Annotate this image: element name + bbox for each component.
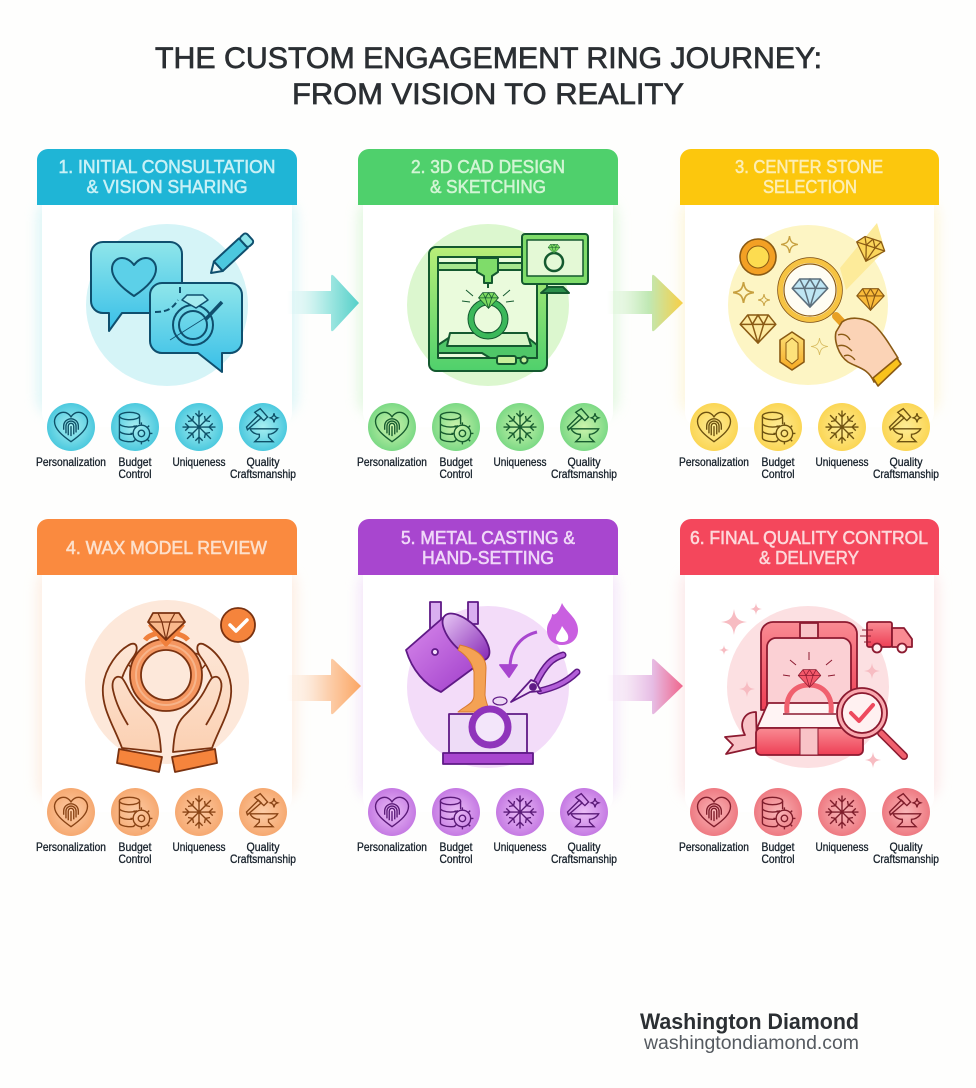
heading: step 2: 2. 3D CAD DESIGN [411, 157, 565, 177]
badge: personalization: Personalization [357, 455, 427, 469]
badge: uniqueness [816, 403, 868, 469]
badge: uniqueness: Uniqueness [172, 840, 226, 854]
heading: step 5: 5. METAL CASTING & [401, 528, 575, 548]
brand footer: Washington Diamond [640, 1009, 859, 1034]
badge: uniqueness: Uniqueness [816, 455, 868, 469]
heading: step 2: & SKETCHING [430, 177, 546, 197]
badge: personalization [679, 403, 749, 469]
heading: step 2 [358, 149, 618, 205]
illustration: 3D printer and monitor with ring [407, 224, 588, 386]
badge: budget control [754, 403, 802, 481]
brand footer: washingtondiamond.com [643, 1033, 859, 1054]
panel: step 6 final quality control [679, 519, 939, 866]
badge: uniqueness [816, 788, 868, 854]
badge: uniqueness [494, 403, 546, 469]
badge: personalization: Personalization [679, 455, 749, 469]
panel: step 2 3D CAD design [357, 149, 618, 481]
heading: step 6: & DELIVERY [759, 548, 859, 568]
badge: uniqueness: Uniqueness [172, 455, 226, 469]
badge: personalization [36, 788, 106, 854]
illustration: magnifier over gemstones held by hand [728, 223, 901, 386]
arrow: step 1 to 2 [287, 275, 359, 331]
title: THE CUSTOM ENGAGEMENT RING JOURNEY: [155, 42, 822, 75]
badge: quality craftsmanship: Craftsmanship [551, 852, 617, 866]
title [155, 42, 822, 111]
badge: quality craftsmanship: Quality [246, 455, 280, 469]
heading: step 1: 1. INITIAL CONSULTATION [58, 157, 276, 177]
badge: personalization: Personalization [679, 840, 749, 854]
badge: uniqueness [172, 403, 226, 469]
badge: personalization: Personalization [36, 840, 106, 854]
badge: quality craftsmanship [230, 788, 296, 866]
badge: uniqueness [494, 788, 546, 854]
badge: budget control: Budget [440, 840, 473, 854]
arrow: step 4 to 5 [287, 659, 361, 714]
badge: personalization [679, 788, 749, 854]
badge: quality craftsmanship: Quality [568, 455, 600, 469]
badge: uniqueness: Uniqueness [494, 455, 546, 469]
badge: budget control: Control [440, 852, 472, 866]
badge: budget control: Budget [762, 455, 795, 469]
badge: quality craftsmanship [551, 788, 617, 866]
badge: budget control: Control [762, 852, 794, 866]
illustration: hands holding wax ring [85, 600, 255, 772]
badge: quality craftsmanship: Craftsmanship [230, 467, 296, 481]
heading: step 6: 6. FINAL QUALITY CONTROL [690, 528, 928, 548]
panel: step 3 center stone selection [679, 149, 939, 481]
badge: personalization: Personalization [36, 455, 106, 469]
heading: step 1: & VISION SHARING [86, 177, 248, 197]
badge: personalization: Personalization [357, 840, 427, 854]
illustration: ring box with magnifier and delivery truck [719, 603, 912, 768]
badge: budget control: Budget [118, 455, 152, 469]
arrow: step 2 to 3 [607, 275, 683, 331]
badge: budget control [432, 788, 480, 866]
badge: personalization [357, 403, 427, 469]
illustration: speech bubbles with heart and ring sketch [86, 224, 254, 386]
badge: quality craftsmanship: Quality [246, 840, 280, 854]
badge: budget control: Control [762, 467, 794, 481]
badge: quality craftsmanship [551, 403, 617, 481]
heading: step 3 [680, 149, 939, 205]
badge: quality craftsmanship: Craftsmanship [873, 467, 939, 481]
badge: quality craftsmanship: Craftsmanship [873, 852, 939, 866]
badge: personalization [357, 788, 427, 854]
badge: budget control [432, 403, 480, 481]
badge: budget control: Budget [762, 840, 795, 854]
badge: budget control: Control [440, 467, 472, 481]
heading: step 5 [358, 519, 618, 575]
title: FROM VISION TO REALITY [292, 78, 684, 111]
badge: uniqueness [172, 788, 226, 854]
heading: step 3: 3. CENTER STONE [735, 157, 883, 177]
heading: step 4: 4. WAX MODEL REVIEW [66, 538, 267, 558]
badge: budget control: Budget [440, 455, 473, 469]
badge: uniqueness: Uniqueness [816, 840, 868, 854]
badge: quality craftsmanship [873, 403, 939, 481]
badge: quality craftsmanship [230, 403, 296, 481]
badge: budget control [111, 788, 159, 866]
heading: step 4 [37, 519, 297, 575]
heading: step 5: HAND-SETTING [422, 548, 554, 568]
panel: step 5 metal casting [357, 519, 618, 866]
heading: step 6 [680, 519, 939, 575]
brand footer [640, 1009, 859, 1054]
badge: personalization [36, 403, 106, 469]
badge: quality craftsmanship: Quality [890, 840, 922, 854]
badge: budget control: Control [118, 852, 152, 866]
panel: step 1 initial consultation [36, 149, 297, 481]
badge: budget control [111, 403, 159, 481]
badge: uniqueness: Uniqueness [494, 840, 546, 854]
badge: quality craftsmanship: Craftsmanship [230, 852, 296, 866]
badge: quality craftsmanship: Quality [568, 840, 600, 854]
heading: step 3: SELECTION [763, 177, 857, 197]
badge: budget control: Budget [118, 840, 152, 854]
arrow: step 5 to 6 [607, 659, 683, 714]
badge: quality craftsmanship: Quality [890, 455, 922, 469]
panel: step 4 wax model review [36, 519, 297, 866]
badge: quality craftsmanship: Craftsmanship [551, 467, 617, 481]
badge: budget control [754, 788, 802, 866]
badge: quality craftsmanship [873, 788, 939, 866]
illustration: crucible pouring metal, pliers and flame [406, 602, 578, 768]
badge: budget control: Control [118, 467, 152, 481]
heading: step 1 [37, 149, 297, 205]
